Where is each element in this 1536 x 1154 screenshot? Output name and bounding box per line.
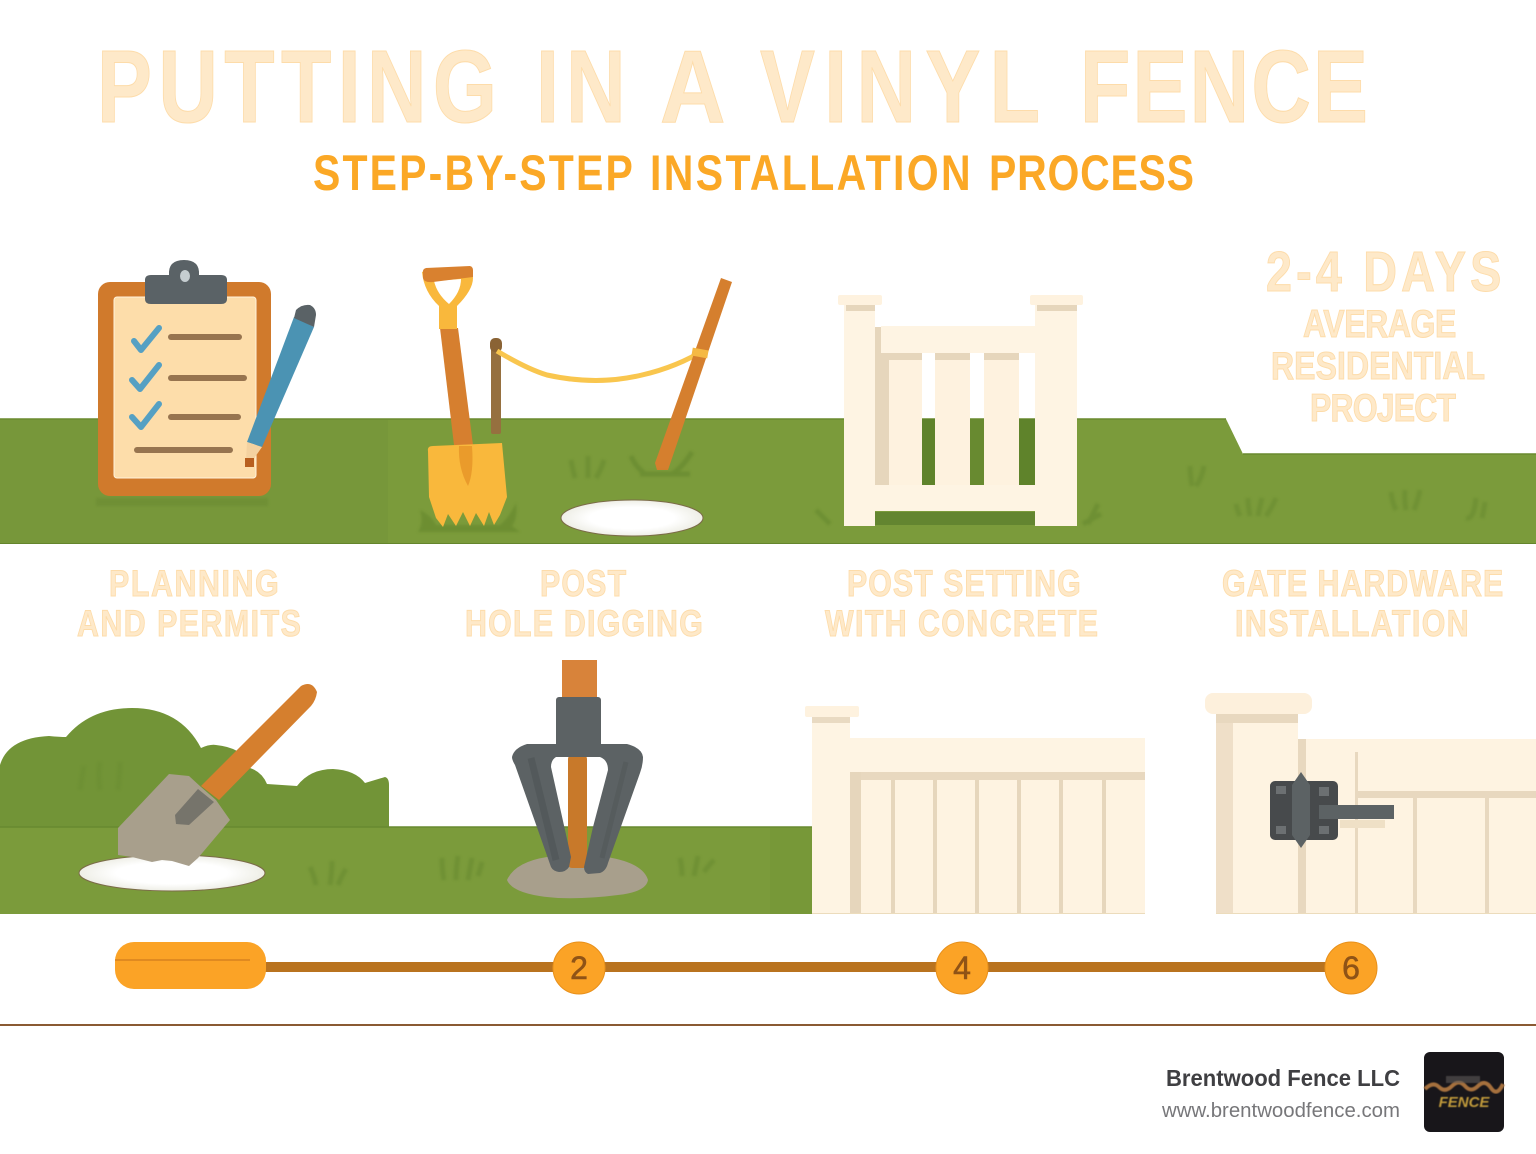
- footer: logo: FENCE: [1439, 1094, 1490, 1111]
- label: post hole digging: HOLE DIGGING: [465, 603, 703, 645]
- timeline: start marker: [115, 942, 266, 989]
- icon: string line with stakes: [490, 278, 732, 478]
- label: gate hardware installation: GATE HARDWARE: [1222, 563, 1503, 605]
- label: gate hardware installation: INSTALLATION: [1235, 603, 1469, 645]
- stat: 2-4 days: PROJECT: [1310, 386, 1456, 430]
- icon: clipboard checklist: [96, 260, 316, 506]
- subtitle: INSTALLATION: [650, 145, 971, 201]
- title: FENCE: [1080, 29, 1368, 144]
- grass under spade: [418, 503, 520, 532]
- subtitle: STEP-BY-STEP: [313, 145, 633, 201]
- footer: company name: Brentwood Fence LLC: [1166, 1065, 1400, 1091]
- icon: fence post and gate panel: [1205, 693, 1536, 914]
- icon: hole and shovel: [79, 684, 317, 891]
- grass tufts: right of gate: [1190, 466, 1485, 518]
- timeline: marker 6: [1325, 942, 1377, 994]
- upper grass band: [0, 419, 1536, 544]
- label: post setting with concrete: [825, 563, 1098, 645]
- timeline: marker 4: [936, 942, 988, 994]
- title: A: [660, 29, 725, 144]
- icon: post hole digger: [507, 660, 648, 898]
- stat: 2-4 days: AVERAGE: [1303, 302, 1456, 346]
- timeline: marker 2: [553, 942, 605, 994]
- label: post setting with concrete: WITH CONCRETE: [825, 603, 1098, 645]
- stat: 2-4 days: 2-4 DAYS: [1266, 241, 1501, 304]
- lower grass and bushes: [0, 708, 812, 914]
- stat: 2-4 days: RESIDENTIAL: [1271, 344, 1485, 388]
- label: planning and permits: PLANNING: [109, 563, 279, 605]
- label: planning and permits: AND PERMITS: [77, 603, 301, 645]
- footer: website: www.brentwoodfence.com: [1161, 1100, 1400, 1122]
- label: gate hardware installation: [1222, 563, 1503, 645]
- stat: 2-4 days: [1266, 241, 1501, 430]
- title: PUTTING: [97, 29, 497, 144]
- timeline: marker 4: 4: [953, 950, 971, 986]
- label: post setting with concrete: POST SETTING: [847, 563, 1081, 605]
- label: post hole digging: POST: [540, 563, 626, 605]
- icon: spade: [418, 266, 520, 532]
- title: IN: [536, 29, 626, 144]
- label: planning and permits: [77, 563, 301, 645]
- icon: vinyl fence panel: [805, 706, 1145, 914]
- subtitle: PROCESS: [989, 145, 1194, 201]
- title: VINYL: [760, 29, 1040, 144]
- icon: vinyl gate: [816, 295, 1101, 526]
- timeline: [115, 942, 1377, 994]
- footer: logo: [1424, 1052, 1504, 1132]
- timeline: marker 2: 2: [570, 950, 588, 986]
- title: [97, 29, 1368, 144]
- icon: gate latch: [1270, 772, 1394, 848]
- timeline: marker 6: 6: [1342, 950, 1360, 986]
- icon: post hole: [561, 500, 703, 536]
- label: post hole digging: [465, 563, 703, 645]
- subtitle: [313, 145, 1194, 201]
